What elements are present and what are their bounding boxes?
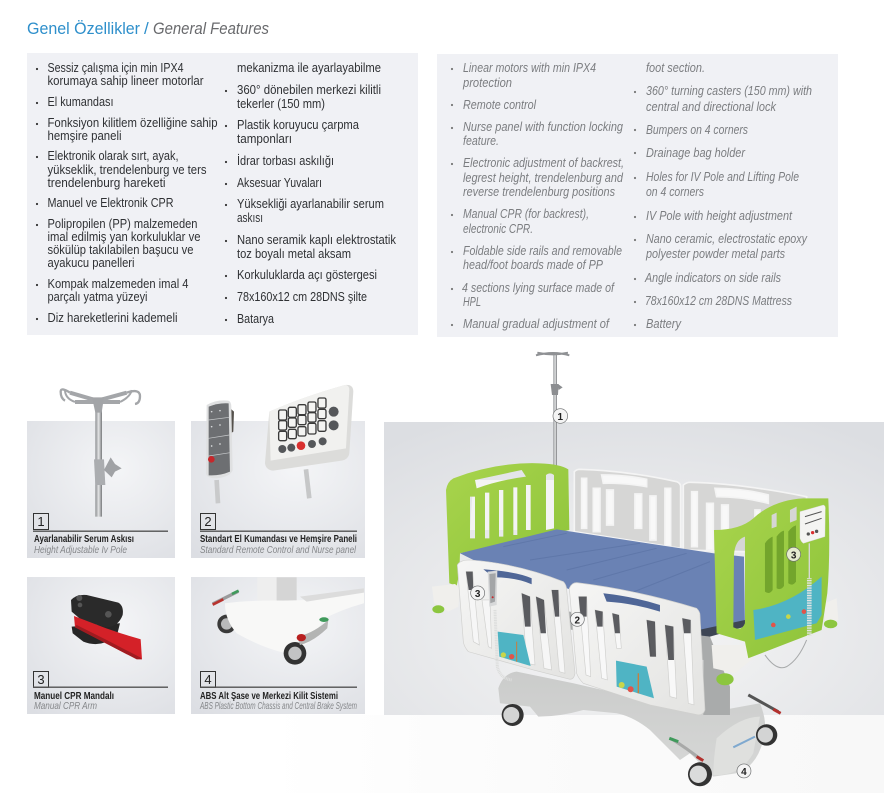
number badge 3: 3 (37, 672, 45, 687)
panel: English feature list: 78x160x12 cm 28DNS Mattress (645, 294, 792, 308)
panel: Turkish feature list: Nano seramik kaplı elektrostatik (237, 233, 397, 247)
icon: hand remote (206, 400, 234, 503)
number badge 2 (200, 514, 216, 530)
caption 1: Ayarlanabilir Serum Askısı (34, 533, 134, 545)
panel: Turkish feature list: askısı (237, 211, 263, 225)
title: General Features (153, 19, 269, 38)
panel: Turkish feature list: Diz hareketlerini kademeli (48, 311, 178, 325)
under-frame (467, 593, 730, 715)
panel: Turkish feature list: mekanizma ile ayarlayabilme (237, 61, 381, 75)
panel: Turkish feature list: Elektronik olarak sırt, ayak, (48, 149, 178, 163)
bed backdrop (268, 422, 884, 793)
callout 2 (570, 612, 584, 626)
IV pole (536, 353, 569, 468)
caption 3: Manuel CPR Mandalı (34, 690, 114, 702)
panel: Turkish feature list (27, 53, 418, 335)
panel: Turkish feature list: Yüksekliği ayarlanabilir serum (237, 197, 384, 211)
panel: Turkish feature list: El kumandası (48, 95, 114, 109)
panel: English feature list: Nano ceramic, electrostatic epoxy (646, 232, 808, 246)
panel: Turkish feature list: Fonksiyon kilitlem özelliğine sahip (48, 116, 218, 130)
panel: English feature list: IV Pole with height adjustment (646, 209, 792, 223)
panel: English feature list: Foldable side rails and removable (463, 244, 622, 258)
icon: nurse panel (265, 385, 353, 498)
panel: English feature list: Electronic adjustment of backrest, (463, 156, 624, 170)
brake pedals (669, 695, 781, 761)
panel: English feature list: Holes for IV Pole and Lifting Pole (646, 170, 799, 184)
panel: English feature list: foot section. (646, 61, 705, 75)
green footboard (714, 498, 829, 668)
panel: English feature list: Battery (646, 317, 682, 331)
panel: English feature list: Linear motors with min IPX4 (463, 61, 596, 75)
panel: Turkish feature list: trendelenburg hareketi (48, 176, 166, 190)
panel: English feature list: 360° turning casters (150 mm) with (646, 84, 812, 98)
nurse panel on footboard (800, 505, 825, 543)
panel: English feature list: Nurse panel with function locking (463, 120, 623, 134)
number badge 4 (200, 672, 216, 688)
panel: English feature list (437, 54, 838, 337)
panel: English feature list: polyester powder metal parts (645, 247, 785, 261)
panel: English feature list: reverse trendelenburg positions (463, 185, 615, 199)
left bumper (432, 584, 460, 613)
panel: 3 manual CPR arm (27, 577, 175, 714)
illustration: pediatric hospital bed (432, 353, 838, 786)
panel: Turkish feature list: Batarya (237, 312, 274, 326)
number badge 1 (34, 514, 48, 530)
panel: Turkish feature list: ayakucu panelleri (48, 256, 134, 270)
number badge 1: 1 (37, 514, 45, 529)
callout 1 (553, 409, 568, 423)
icon: IV pole (61, 389, 140, 517)
callout 4: 4 (741, 767, 747, 778)
icon: chassis and casters (213, 577, 364, 665)
casters (502, 704, 777, 786)
callout 3 left: 3 (475, 589, 481, 600)
caption 2: Standard Remote Control and Nurse panel (200, 544, 357, 556)
title: / (144, 19, 149, 38)
caption 4 (199, 690, 357, 712)
caption 1 (34, 533, 134, 556)
panel: 4 ABS chassis and central brake (191, 577, 365, 714)
panel: Turkish feature list: hemşire paneli (48, 129, 122, 143)
panel: Turkish feature list: 360° dönebilen merkezi kilitli (237, 83, 381, 97)
mattress (460, 529, 745, 637)
callout 3 left (471, 586, 485, 600)
panel: Turkish feature list: parçalı yatma yüzeyi (48, 290, 148, 304)
panel: Turkish feature list: Polipropilen (PP) malzemeden (48, 217, 198, 231)
panel: Turkish feature list: tekerler (150 mm) (237, 97, 325, 111)
hand remote on rail (488, 571, 497, 607)
panel: Turkish feature list: Manuel ve Elektronik CPR (48, 196, 174, 210)
panel: Turkish feature list: Plastik koruyucu çarpma (237, 118, 359, 132)
panel: English feature list: 4 sections lying surface made of (462, 281, 615, 295)
panel: English feature list: Manual CPR (for backrest), (463, 207, 589, 221)
callout 2: 2 (575, 615, 581, 626)
panel: English feature list: on 4 corners (646, 185, 704, 199)
panel: English feature list: Drainage bag holder (646, 146, 746, 160)
caption 2: Standart El Kumandası ve Hemşire Paneli (200, 533, 357, 545)
rear white rail 2 (683, 482, 807, 553)
number badge 3 (34, 672, 48, 688)
panel: English feature list: legrest height, trendelenburg and (463, 171, 624, 185)
panel: Turkish feature list: imal edilmiş yan korkuluklar ve (48, 230, 201, 244)
panel: English feature list: Angle indicators on side rails (644, 271, 781, 285)
title (27, 19, 269, 38)
title: Genel Özellikler (27, 19, 140, 38)
panel: English feature list: central and directional lock (646, 100, 777, 114)
panel: English feature list: Remote control (463, 98, 537, 112)
front side rail left (457, 560, 575, 680)
green headboard (446, 463, 569, 586)
panel: English feature list: Bumpers on 4 corners (646, 123, 748, 137)
number badge 4: 4 (204, 672, 212, 687)
chassis base (498, 672, 765, 777)
callout 1: 1 (558, 412, 564, 423)
panel: Turkish feature list: yükseklik, trendelenburg ve ters (48, 163, 206, 177)
panel: English feature list: Manual gradual adjustment of (463, 317, 610, 331)
panel: English feature list: protection (462, 76, 512, 90)
panel: 1 height adjustable IV pole (27, 389, 175, 558)
panel: Turkish feature list: sökülüp takılabilen başucu ve (48, 243, 194, 257)
caption 4: ABS Alt Şase ve Merkezi Kilit Sistemi (200, 690, 338, 702)
panel: Turkish feature list: Sessiz çalışma için min IPX4 (48, 61, 184, 75)
panel: Turkish feature list: Korkuluklarda açı göstergesi (237, 268, 377, 282)
caption 2 (200, 533, 357, 556)
callout 3 right: 3 (791, 550, 797, 561)
caption 3: Manual CPR Arm (34, 700, 97, 712)
rear white rail 1 (574, 469, 681, 548)
front side rail right (569, 583, 705, 715)
icon: CPR lever (71, 595, 142, 659)
panel: Turkish feature list: Aksesuar Yuvaları (237, 176, 322, 190)
callout 3 right (787, 547, 801, 561)
panel: English feature list: head/foot boards made of PP (463, 258, 604, 272)
panel: Turkish feature list: tamponları (237, 132, 292, 146)
panel: Turkish feature list: toz boyalı metal aksam (237, 247, 351, 261)
panel: English feature list: feature. (463, 134, 499, 148)
panel: English feature list: electronic CPR. (463, 222, 533, 236)
panel: Turkish feature list: korumaya sahip lineer motorlar (48, 74, 204, 88)
panel: 2 remote control and nurse panel (191, 385, 365, 558)
panel: Turkish feature list: İdrar torbası askılığı (237, 154, 334, 168)
callout 4 (737, 764, 751, 778)
caption 1: Height Adjustable Iv Pole (34, 544, 127, 556)
panel: English feature list: HPL (463, 295, 481, 309)
number badge 2: 2 (204, 514, 212, 529)
panel: Turkish feature list: 78x160x12 cm 28DNS şilte (237, 290, 367, 304)
panel: Turkish feature list: Kompak malzemeden imal 4 (48, 277, 189, 291)
caption 3 (34, 690, 114, 712)
right frame corner bumpers (712, 598, 838, 685)
caption 4: ABS Plastic Bottom Chassis and Central Brake System (199, 700, 357, 712)
